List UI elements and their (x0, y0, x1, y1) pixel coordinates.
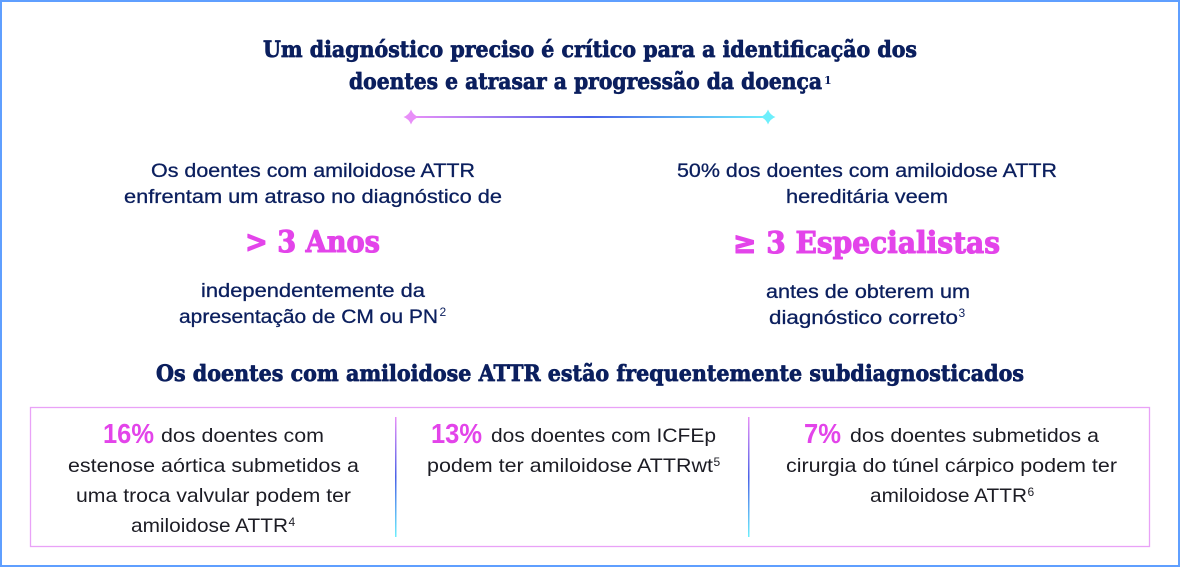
panel: specialists seen (677, 160, 1057, 329)
divider left (395, 417, 396, 537)
specialists closing text: antes de obterem um (766, 281, 970, 303)
stat: 13%: 5 (714, 455, 720, 469)
stat: 13%: 13% (431, 418, 482, 449)
delay intro text: Os doentes com amiloidose ATTR (151, 160, 475, 182)
stat: 16%: 16% (103, 418, 154, 449)
specialists closing text: diagnóstico correto (769, 307, 958, 329)
delay closing text: independentemente da (201, 280, 425, 302)
stat: 13%: podem ter amiloidose ATTRwt (427, 455, 714, 477)
stat: 13% (427, 418, 720, 477)
panel: underdiagnosis statistics (30, 408, 1150, 546)
title: Um diagnóstico preciso é crítico para a identificação dos (263, 37, 917, 63)
panel: diagnostic delay (124, 160, 502, 328)
specialists intro text: hereditária veem (786, 186, 948, 208)
delay intro text (124, 160, 502, 208)
panel border (30, 408, 1150, 546)
stat: 7%: 7% (804, 418, 841, 449)
delay figure: > 3 Anos (245, 225, 380, 260)
subheading: Os doentes com amiloidose ATTR estão frequentemente subdiagnosticados (156, 361, 1024, 387)
stat: 7%: 6 (1028, 485, 1034, 499)
title: 1 (824, 74, 832, 87)
stat: 16%: amiloidose ATTR (131, 515, 288, 537)
stat: 7% (786, 418, 1118, 507)
delay closing text: 2 (440, 305, 446, 319)
specialists intro text (677, 160, 1057, 208)
stat: 16%: estenose aórtica submetidos a (68, 455, 359, 477)
title (263, 37, 917, 95)
stat: 13%: dos doentes com ICFEp (491, 425, 716, 447)
stat: 7%: amiloidose ATTR (870, 485, 1027, 507)
gradient divider with stars (404, 110, 776, 124)
delay closing text: apresentação de CM ou PN (179, 306, 438, 328)
specialists closing text: 3 (958, 306, 966, 320)
stat: 16%: 4 (288, 515, 296, 529)
specialists figure: ≥ 3 Especialistas (733, 226, 1000, 261)
stat: 7%: cirurgia do túnel cárpico podem ter (786, 455, 1118, 477)
stat: 16%: uma troca valvular podem ter (76, 485, 352, 507)
specialists closing text (766, 281, 970, 329)
delay closing text (179, 280, 446, 328)
stat: 16%: dos doentes com (161, 425, 324, 447)
specialists intro text: 50% dos doentes com amiloidose ATTR (677, 160, 1057, 182)
stat: 7%: dos doentes submetidos a (850, 425, 1099, 447)
delay intro text: enfrentam um atraso no diagnóstico de (124, 186, 502, 208)
stat: 16% (68, 418, 359, 537)
title: doentes e atrasar a progressão da doença (349, 69, 822, 95)
divider right (748, 417, 750, 537)
